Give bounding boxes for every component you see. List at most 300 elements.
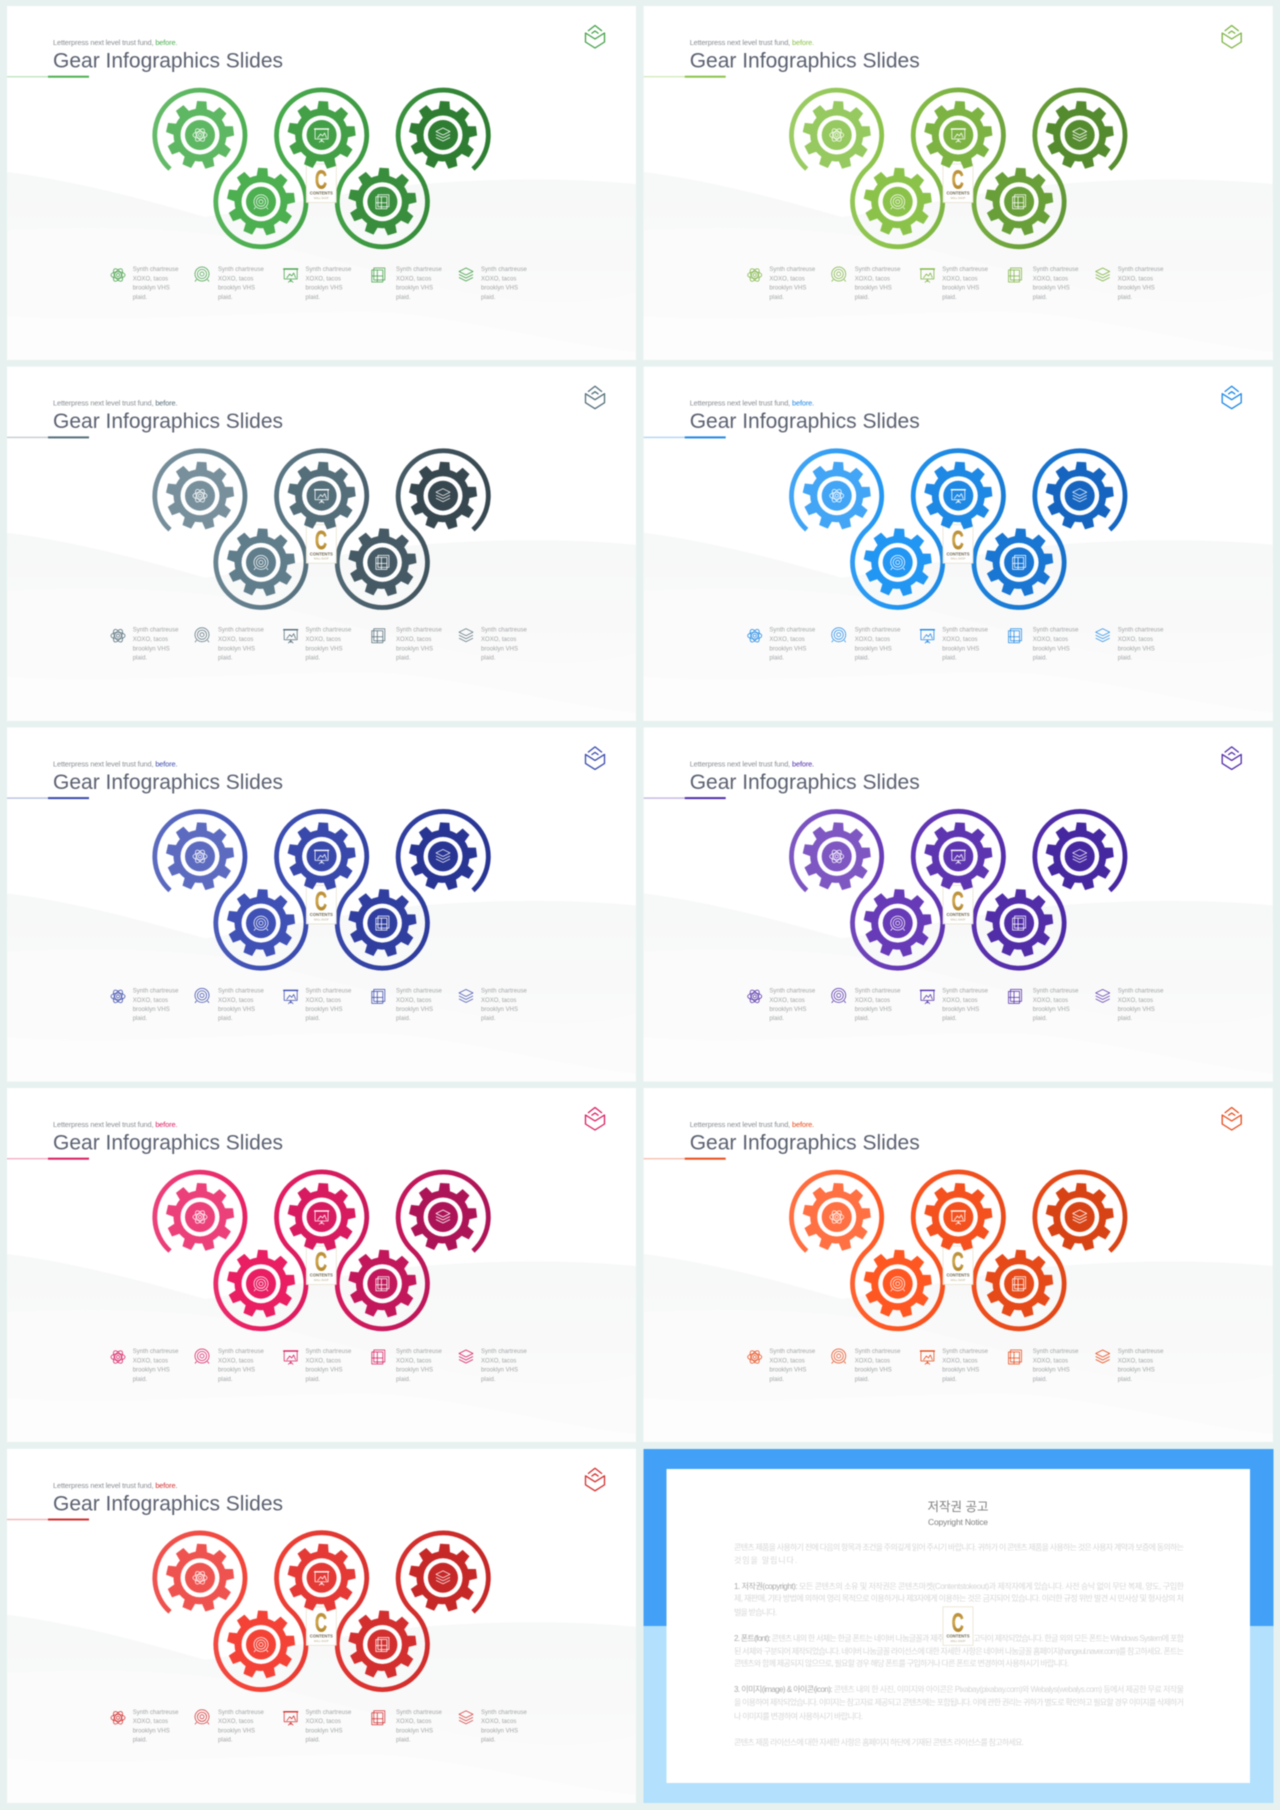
title underline bbox=[7, 1158, 89, 1160]
section 1: copyright bbox=[734, 1581, 1185, 1617]
watermark logo bbox=[306, 885, 336, 924]
legend item 5: XOXO, tacos bbox=[481, 1719, 516, 1725]
legend item 4: plaid. bbox=[396, 1738, 411, 1744]
legend item 2 bbox=[832, 628, 901, 662]
gear 5 bbox=[407, 460, 479, 531]
legend item 5: brooklyn VHS bbox=[1118, 1007, 1155, 1013]
legend item 5: Synth chartreuse bbox=[481, 267, 527, 273]
slide 4: blue bbox=[644, 367, 1273, 721]
legend item 5: brooklyn VHS bbox=[1118, 646, 1155, 652]
legend item 2: brooklyn VHS bbox=[855, 286, 892, 292]
legend item 3: brooklyn VHS bbox=[942, 646, 979, 652]
legend item 4: Synth chartreuse bbox=[1033, 628, 1079, 634]
gear 2 bbox=[225, 1609, 297, 1680]
notice title: 저작권 공고 bbox=[928, 1500, 988, 1514]
gear 2 bbox=[862, 166, 934, 237]
legend item 4: Synth chartreuse bbox=[1033, 988, 1079, 994]
kicker text: Letterpress next level trust fund, before. bbox=[53, 1120, 178, 1129]
icon: cube bbox=[1222, 386, 1241, 409]
title underline bbox=[7, 76, 89, 78]
legend item 4 bbox=[372, 628, 442, 662]
title: Gear Infographics Slides bbox=[690, 1132, 920, 1154]
legend item 3: Synth chartreuse bbox=[306, 628, 352, 634]
kicker text: Letterpress next level trust fund, before. bbox=[53, 1481, 178, 1490]
legend item 5: XOXO, tacos bbox=[481, 637, 516, 643]
icon: cube bbox=[1222, 1108, 1241, 1130]
legend item 4: plaid. bbox=[396, 295, 411, 301]
legend item 3: plaid. bbox=[306, 1738, 320, 1744]
legend item 4: plaid. bbox=[1033, 295, 1048, 301]
legend item 3: plaid. bbox=[942, 1377, 957, 1383]
legend item 1: plaid. bbox=[769, 1016, 784, 1022]
legend item 3: brooklyn VHS bbox=[306, 646, 343, 652]
white sheet bbox=[666, 1469, 1250, 1783]
legend item 5: brooklyn VHS bbox=[481, 1007, 518, 1013]
title: Gear Infographics Slides bbox=[690, 50, 920, 72]
legend item 3 bbox=[920, 988, 989, 1022]
legend item 3 bbox=[283, 267, 352, 301]
legend item 4: brooklyn VHS bbox=[396, 286, 433, 292]
slide 2: light green bbox=[644, 6, 1273, 360]
legend item 3 bbox=[283, 988, 352, 1022]
legend item 5: Synth chartreuse bbox=[481, 988, 527, 994]
legend item 3: XOXO, tacos bbox=[306, 637, 341, 643]
legend item 5: brooklyn VHS bbox=[481, 1368, 518, 1374]
legend item 2: Synth chartreuse bbox=[855, 1349, 901, 1355]
gear chain bbox=[791, 811, 1125, 968]
legend item 3: XOXO, tacos bbox=[942, 998, 978, 1004]
gear chain bbox=[791, 1172, 1125, 1329]
kicker text: Letterpress next level trust fund, before. bbox=[53, 38, 178, 47]
section 1: copyright: 1. 저작권(copyright): 모든 콘텐츠의 소유 및 저작권은 콘텐츠마켓(Contentstokeout)과 제작자에게 있습니다. 사전 승낙 없이 무단 복제, 양도, 구입한 bbox=[734, 1581, 1185, 1591]
legend item 5: plaid. bbox=[481, 1016, 496, 1022]
legend item 1: Synth chartreuse bbox=[133, 988, 179, 994]
title: Gear Infographics Slides bbox=[690, 410, 920, 433]
legend item 1: brooklyn VHS bbox=[133, 1007, 170, 1013]
legend item 4: XOXO, tacos bbox=[1033, 1358, 1068, 1364]
title underline bbox=[644, 436, 726, 438]
legend item 4: brooklyn VHS bbox=[1033, 646, 1070, 652]
gear 4 bbox=[983, 527, 1055, 598]
legend item 3: XOXO, tacos bbox=[306, 998, 341, 1004]
gear 4 bbox=[346, 888, 418, 959]
legend item 5: Synth chartreuse bbox=[481, 1349, 527, 1355]
icon: cube bbox=[586, 26, 604, 48]
icon: cube bbox=[586, 747, 604, 769]
legend item 5: XOXO, tacos bbox=[481, 998, 516, 1004]
panel background bbox=[7, 367, 636, 721]
legend item 3: brooklyn VHS bbox=[942, 1007, 979, 1013]
legend item 4: plaid. bbox=[396, 1377, 411, 1383]
legend item 3: XOXO, tacos bbox=[942, 1358, 978, 1364]
legend item 1: plaid. bbox=[133, 295, 148, 301]
legend item 5: XOXO, tacos bbox=[1118, 1358, 1153, 1364]
kicker text: Letterpress next level trust fund, before. bbox=[53, 759, 178, 768]
gear 3 bbox=[286, 1181, 358, 1252]
legend item 5: XOXO, tacos bbox=[1118, 637, 1153, 643]
title underline bbox=[7, 1518, 89, 1520]
legend item 5 bbox=[1096, 267, 1164, 301]
legend item 4: brooklyn VHS bbox=[396, 646, 433, 652]
legend item 1 bbox=[111, 1349, 179, 1383]
legend item 4: plaid. bbox=[1033, 1377, 1048, 1383]
icon: cube bbox=[586, 1468, 604, 1491]
legend item 3: XOXO, tacos bbox=[942, 276, 978, 282]
title: Gear Infographics Slides bbox=[53, 50, 283, 72]
legend item 1: XOXO, tacos bbox=[133, 1719, 168, 1725]
slide 7: pink bbox=[7, 1088, 636, 1442]
legend item 4: XOXO, tacos bbox=[396, 637, 431, 643]
legend item 3: brooklyn VHS bbox=[942, 1368, 979, 1374]
kicker text: Letterpress next level trust fund, before. bbox=[690, 399, 814, 408]
gear 3 bbox=[922, 1181, 994, 1252]
legend item 4: brooklyn VHS bbox=[1033, 1007, 1070, 1013]
legend item 4 bbox=[1008, 267, 1079, 301]
gear 3 bbox=[922, 99, 994, 170]
gear 1 bbox=[164, 821, 236, 892]
legend item 4 bbox=[372, 1710, 442, 1744]
legend item 2: Synth chartreuse bbox=[218, 267, 264, 273]
gear 4 bbox=[983, 166, 1055, 237]
legend item 2: plaid. bbox=[855, 1016, 870, 1022]
section 1: copyright: 제, 재판매, 기타 방법에 의하여 영리 목적으로 이용하거나 제3자에게 이용하는 것은 금지되어 있습니다. 이러한 규정 위반 발견 시 민사상 및 형사상의 처 bbox=[734, 1593, 1184, 1603]
title: Gear Infographics Slides bbox=[53, 1132, 283, 1154]
legend item 4: Synth chartreuse bbox=[396, 1710, 442, 1716]
legend item 4: brooklyn VHS bbox=[396, 1007, 433, 1013]
legend item 4: XOXO, tacos bbox=[1033, 276, 1068, 282]
gear 5 bbox=[1044, 99, 1116, 170]
gear 1 bbox=[164, 1542, 236, 1613]
watermark logo bbox=[943, 885, 973, 924]
legend item 3: XOXO, tacos bbox=[306, 1719, 341, 1725]
legend item 5: plaid. bbox=[481, 656, 496, 662]
legend item 1: plaid. bbox=[133, 1016, 148, 1022]
legend item 1: XOXO, tacos bbox=[769, 637, 805, 643]
watermark logo bbox=[306, 1246, 336, 1284]
gear chain bbox=[155, 1533, 488, 1690]
gear 4 bbox=[983, 1248, 1055, 1319]
slide 8: deep orange bbox=[644, 1088, 1273, 1442]
legend item 5: Synth chartreuse bbox=[481, 1710, 527, 1716]
legend item 2 bbox=[195, 1710, 264, 1744]
legend item 2: XOXO, tacos bbox=[855, 276, 890, 282]
legend item 1: plaid. bbox=[133, 1738, 148, 1744]
gear 1 bbox=[164, 460, 236, 531]
legend item 2: XOXO, tacos bbox=[218, 1358, 253, 1364]
legend item 4: Synth chartreuse bbox=[396, 628, 442, 634]
legend item 3 bbox=[920, 1349, 989, 1383]
icon: cube bbox=[1222, 26, 1241, 48]
legend item 5: brooklyn VHS bbox=[481, 646, 518, 652]
legend item 2: plaid. bbox=[855, 295, 870, 301]
legend item 2: plaid. bbox=[218, 1016, 233, 1022]
kicker text: Letterpress next level trust fund, before. bbox=[690, 759, 814, 768]
legend item 4: plaid. bbox=[396, 656, 411, 662]
gear 1 bbox=[801, 821, 873, 892]
kicker text: Letterpress next level trust fund, before. bbox=[53, 399, 178, 408]
legend item 3: plaid. bbox=[942, 656, 957, 662]
title: Gear Infographics Slides bbox=[53, 771, 283, 794]
gear 5 bbox=[407, 99, 479, 170]
legend item 1: XOXO, tacos bbox=[769, 276, 805, 282]
legend item 4: plaid. bbox=[396, 1016, 411, 1022]
legend item 2 bbox=[195, 267, 264, 301]
legend item 3: XOXO, tacos bbox=[942, 637, 978, 643]
legend item 2: Synth chartreuse bbox=[218, 1710, 264, 1716]
legend item 1 bbox=[748, 1349, 816, 1383]
legend item 1: brooklyn VHS bbox=[769, 286, 806, 292]
legend item 3: XOXO, tacos bbox=[306, 1358, 341, 1364]
legend item 2 bbox=[832, 267, 901, 301]
legend item 2: Synth chartreuse bbox=[855, 988, 901, 994]
legend item 3: plaid. bbox=[306, 1016, 320, 1022]
legend item 4: Synth chartreuse bbox=[1033, 267, 1079, 273]
panel background bbox=[7, 1449, 636, 1803]
gear 5 bbox=[1044, 821, 1116, 892]
legend item 1: brooklyn VHS bbox=[133, 1728, 170, 1734]
legend item 3: plaid. bbox=[306, 1377, 320, 1383]
kicker text: Letterpress next level trust fund, before. bbox=[690, 38, 814, 47]
gear chain bbox=[155, 1172, 488, 1329]
legend item 2: XOXO, tacos bbox=[218, 276, 253, 282]
panel background bbox=[644, 6, 1273, 360]
legend item 5: brooklyn VHS bbox=[1118, 1368, 1155, 1374]
title underline bbox=[644, 76, 726, 78]
panel background bbox=[7, 6, 636, 360]
gear 2 bbox=[862, 1248, 934, 1319]
gear 3 bbox=[922, 460, 994, 531]
title underline bbox=[7, 436, 89, 438]
gear 2 bbox=[225, 527, 297, 598]
legend item 2: Synth chartreuse bbox=[855, 628, 901, 634]
legend item 1 bbox=[111, 988, 179, 1022]
legend item 5: plaid. bbox=[1118, 1016, 1133, 1022]
gear chain bbox=[791, 451, 1125, 608]
legend item 1: brooklyn VHS bbox=[769, 1368, 806, 1374]
legend item 3: Synth chartreuse bbox=[306, 1349, 352, 1355]
legend item 3: brooklyn VHS bbox=[306, 1368, 343, 1374]
watermark logo bbox=[943, 164, 973, 202]
legend item 1: Synth chartreuse bbox=[133, 628, 179, 634]
legend item 1 bbox=[111, 628, 179, 662]
legend item 5: plaid. bbox=[481, 295, 496, 301]
legend item 4: XOXO, tacos bbox=[1033, 998, 1068, 1004]
legend item 5: plaid. bbox=[1118, 656, 1133, 662]
legend item 2: brooklyn VHS bbox=[218, 286, 255, 292]
gear 1 bbox=[801, 99, 873, 170]
legend item 1 bbox=[111, 267, 179, 301]
legend item 3 bbox=[283, 628, 352, 662]
legend item 1 bbox=[748, 628, 816, 662]
legend item 1: XOXO, tacos bbox=[769, 998, 805, 1004]
gear 3 bbox=[286, 821, 358, 892]
legend item 5 bbox=[1096, 1349, 1164, 1383]
legend item 3 bbox=[283, 1710, 352, 1744]
gear 1 bbox=[164, 1181, 236, 1252]
legend item 3: brooklyn VHS bbox=[306, 286, 343, 292]
legend item 5 bbox=[459, 628, 527, 662]
legend item 1 bbox=[748, 267, 816, 301]
section 3: image and icon bbox=[734, 1684, 1184, 1721]
legend item 3 bbox=[920, 628, 989, 662]
title: Gear Infographics Slides bbox=[53, 410, 283, 433]
legend item 2 bbox=[832, 1349, 901, 1383]
legend item 4 bbox=[1008, 1349, 1079, 1383]
gear chain bbox=[155, 811, 488, 968]
legend item 4 bbox=[1008, 628, 1079, 662]
legend item 2 bbox=[832, 988, 901, 1022]
legend item 2: XOXO, tacos bbox=[218, 637, 253, 643]
legend item 3: Synth chartreuse bbox=[942, 267, 989, 273]
legend item 5: Synth chartreuse bbox=[1118, 1349, 1164, 1355]
legend item 2: brooklyn VHS bbox=[218, 1007, 255, 1013]
gear 1 bbox=[801, 460, 873, 531]
legend item 1: Synth chartreuse bbox=[769, 628, 816, 634]
section 3: image and icon: 을 이용하여 제작되었습니다. 이미지는 참고자료 제공되고 콘텐츠에는 포함됩니다. 이에 관한 권리는 귀하가 별도로 확인하고 필요할 경우 이미지를 삭제하거 bbox=[734, 1697, 1184, 1707]
notice subtitle: Copyright Notice bbox=[928, 1517, 988, 1527]
legend item 1: XOXO, tacos bbox=[133, 1358, 168, 1364]
legend item 5: brooklyn VHS bbox=[1118, 286, 1155, 292]
gear 2 bbox=[225, 1248, 297, 1319]
gear chain bbox=[791, 90, 1125, 247]
legend item 3: Synth chartreuse bbox=[306, 1710, 352, 1716]
legend item 1: plaid. bbox=[769, 295, 784, 301]
gear 2 bbox=[225, 166, 297, 237]
legend item 1: brooklyn VHS bbox=[133, 1368, 170, 1374]
legend item 4: brooklyn VHS bbox=[396, 1728, 433, 1734]
legend item 2: brooklyn VHS bbox=[218, 1728, 255, 1734]
legend item 1: Synth chartreuse bbox=[769, 988, 816, 994]
legend item 4: Synth chartreuse bbox=[396, 1349, 442, 1355]
panel background bbox=[644, 727, 1273, 1081]
legend item 5: Synth chartreuse bbox=[1118, 267, 1164, 273]
section 2: font: 된 서체와 구분되어 제작되었습니다. 네이버 나눔글꼴 라이선스에 대한 자세한 사항은 네이버 나눔글꼴 홈페이지(hangeul.naver.com)를 참고하세요. 폰트는 bbox=[734, 1646, 1184, 1656]
panel background bbox=[644, 367, 1273, 721]
legend item 4: XOXO, tacos bbox=[396, 998, 431, 1004]
legend item 1: XOXO, tacos bbox=[769, 1358, 805, 1364]
legend item 2: Synth chartreuse bbox=[855, 267, 901, 273]
legend item 5: plaid. bbox=[481, 1377, 496, 1383]
legend item 4 bbox=[1008, 988, 1079, 1022]
legend item 3: XOXO, tacos bbox=[306, 276, 341, 282]
legend item 5: plaid. bbox=[1118, 295, 1133, 301]
legend item 3: brooklyn VHS bbox=[306, 1007, 343, 1013]
gear 1 bbox=[164, 99, 236, 170]
legend item 3 bbox=[920, 267, 989, 301]
legend item 2: XOXO, tacos bbox=[855, 637, 890, 643]
legend item 2: Synth chartreuse bbox=[218, 988, 264, 994]
panel background bbox=[7, 1088, 636, 1442]
legend item 5: XOXO, tacos bbox=[1118, 998, 1153, 1004]
legend item 2: plaid. bbox=[218, 295, 233, 301]
legend item 3: brooklyn VHS bbox=[942, 286, 979, 292]
legend item 5: Synth chartreuse bbox=[481, 628, 527, 634]
legend item 3: Synth chartreuse bbox=[942, 1349, 989, 1355]
gear 1 bbox=[801, 1181, 873, 1252]
legend item 4: brooklyn VHS bbox=[396, 1368, 433, 1374]
gear 5 bbox=[407, 1542, 479, 1613]
legend item 4: XOXO, tacos bbox=[1033, 637, 1068, 643]
kicker text: Letterpress next level trust fund, before. bbox=[690, 1120, 814, 1129]
legend item 1: Synth chartreuse bbox=[769, 1349, 816, 1355]
legend item 5 bbox=[459, 988, 527, 1022]
gear 4 bbox=[346, 1609, 418, 1680]
legend item 2: plaid. bbox=[855, 1377, 870, 1383]
section 2: font: 2. 폰트(font): 콘텐츠 내의 한 서체는 한글 폰트는 네이버 나눔글꼴과 제주글꼴, 맑은고딕이 제작되었습니다. 한글 외의 모든 폰트는 Windows System에 포함 bbox=[734, 1633, 1185, 1643]
legend item 2: XOXO, tacos bbox=[218, 1719, 253, 1725]
legend item 5 bbox=[459, 267, 527, 301]
legend item 3: plaid. bbox=[942, 1016, 957, 1022]
legend item 3: plaid. bbox=[306, 656, 320, 662]
watermark logo bbox=[943, 525, 973, 563]
section 3: image and icon: 3. 이미지(image) & 아이콘(icon): 콘텐츠 내의 한 사진, 이미지와 아이콘은 Pixabay(pixabay.com)와 Webalys(webalys.com) 등에서 제공한 무료 저작물 bbox=[734, 1684, 1184, 1694]
watermark logo bbox=[306, 525, 336, 563]
legend item 5 bbox=[459, 1710, 527, 1744]
panel: copyright notice bbox=[644, 1449, 1274, 1803]
gear chain bbox=[155, 90, 488, 247]
intro paragraph: 콘텐츠 제품을 사용하기 전에 다음의 항목과 조건을 주의깊게 읽어 주시기 바랍니다. 귀하가 이 콘텐츠 제품을 사용하는 것은 사용자 계약과 보증에 동의하는 bbox=[734, 1542, 1184, 1552]
legend item 2 bbox=[195, 988, 264, 1022]
title underline bbox=[644, 797, 726, 799]
gear 5 bbox=[407, 1181, 479, 1252]
legend item 2: Synth chartreuse bbox=[218, 1349, 264, 1355]
legend item 4 bbox=[372, 1349, 442, 1383]
legend item 4: Synth chartreuse bbox=[1033, 1349, 1079, 1355]
legend item 4: Synth chartreuse bbox=[396, 267, 442, 273]
legend item 5: plaid. bbox=[481, 1738, 496, 1744]
icon: cube bbox=[586, 386, 604, 409]
watermark logo bbox=[306, 164, 336, 202]
legend item 4: XOXO, tacos bbox=[396, 276, 431, 282]
legend item 1: Synth chartreuse bbox=[769, 267, 816, 273]
legend item 5: Synth chartreuse bbox=[1118, 988, 1164, 994]
legend item 2: Synth chartreuse bbox=[218, 628, 264, 634]
gear 3 bbox=[286, 460, 358, 531]
panel background bbox=[7, 727, 636, 1081]
section 1: copyright: 벌을 받습니다. bbox=[734, 1607, 777, 1617]
watermark logo bbox=[943, 1607, 973, 1645]
panel background bbox=[644, 1088, 1273, 1442]
gear 2 bbox=[225, 888, 297, 959]
legend item 3: plaid. bbox=[942, 295, 957, 301]
legend item 2: XOXO, tacos bbox=[855, 998, 890, 1004]
legend item 2: XOXO, tacos bbox=[218, 998, 253, 1004]
legend item 4 bbox=[372, 988, 442, 1022]
legend item 1: Synth chartreuse bbox=[133, 1710, 179, 1716]
title underline bbox=[644, 1158, 726, 1160]
legend item 5 bbox=[1096, 628, 1164, 662]
legend item 2: plaid. bbox=[218, 1377, 233, 1383]
gear 3 bbox=[286, 1542, 358, 1613]
legend item 4: plaid. bbox=[1033, 656, 1048, 662]
icon: cube bbox=[1222, 747, 1241, 769]
legend item 5: brooklyn VHS bbox=[481, 286, 518, 292]
gear 4 bbox=[983, 888, 1055, 959]
gear 4 bbox=[346, 166, 418, 237]
legend item 2: XOXO, tacos bbox=[855, 1358, 890, 1364]
icon: cube bbox=[586, 1108, 604, 1130]
gear 4 bbox=[346, 527, 418, 598]
legend item 4: brooklyn VHS bbox=[1033, 286, 1070, 292]
legend item 5: XOXO, tacos bbox=[1118, 276, 1153, 282]
legend item 2 bbox=[195, 628, 264, 662]
legend item 3: Synth chartreuse bbox=[942, 988, 989, 994]
legend item 2: plaid. bbox=[855, 656, 870, 662]
intro paragraph: 것임을 알립니다. bbox=[734, 1555, 797, 1565]
gear 5 bbox=[407, 821, 479, 892]
legend item 2: plaid. bbox=[218, 1738, 233, 1744]
legend item 3: Synth chartreuse bbox=[942, 628, 989, 634]
